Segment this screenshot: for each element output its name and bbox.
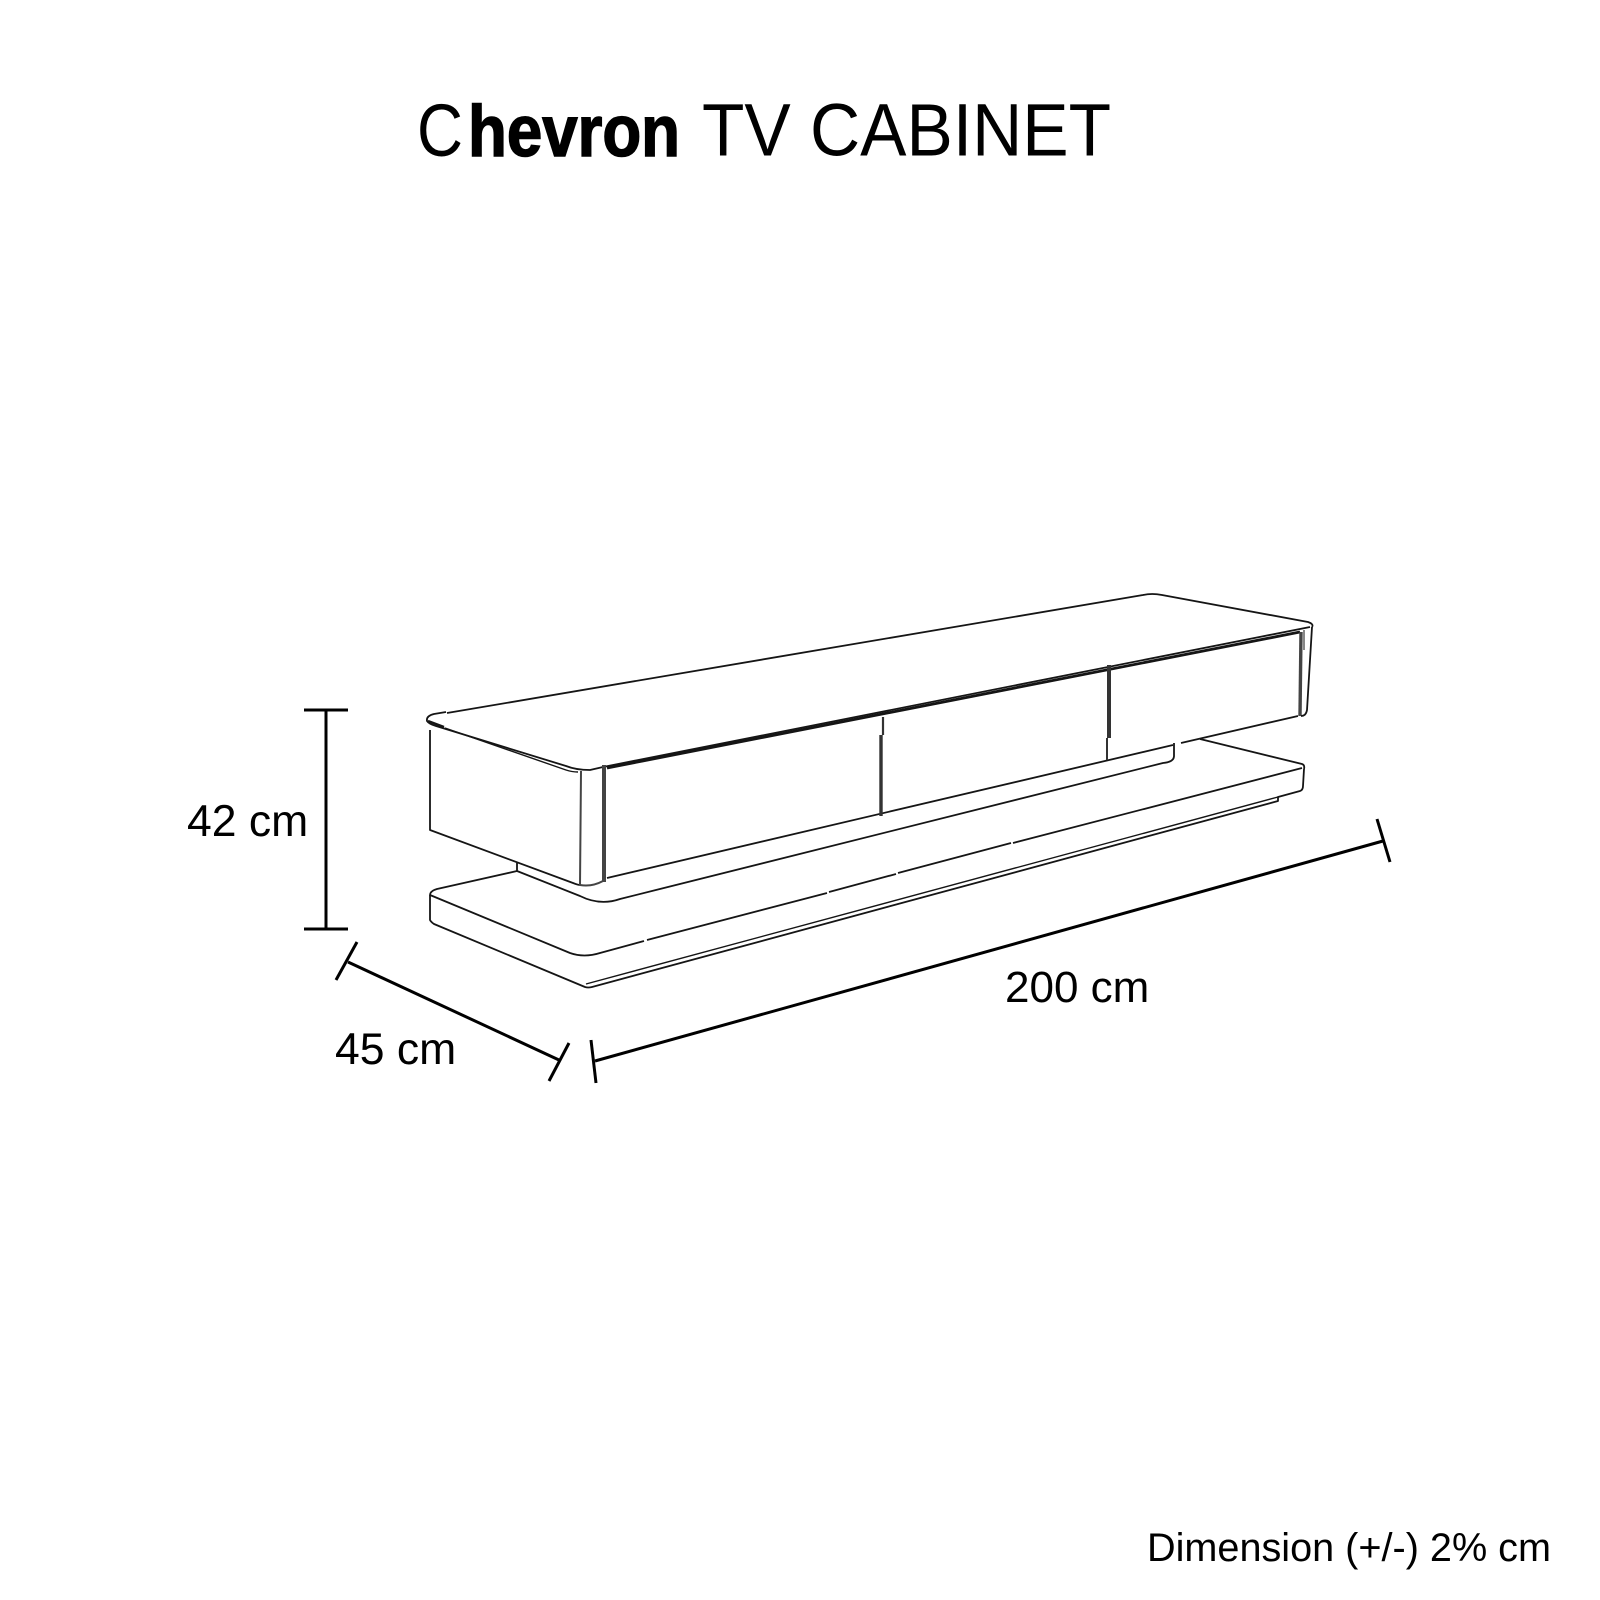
recessed plinth xyxy=(517,743,1174,902)
title xyxy=(417,88,1111,172)
cabinet top surface xyxy=(427,594,1312,772)
base front and side edges xyxy=(430,769,1304,988)
rounded corner post xyxy=(580,765,604,886)
base top surface xyxy=(430,739,1304,956)
height dimension line xyxy=(304,710,348,929)
cabinet right end xyxy=(1300,627,1312,716)
drawer dividers xyxy=(881,665,1109,816)
depth dimension line xyxy=(336,942,569,1081)
title: hevron xyxy=(468,92,680,172)
width label: 200 cm xyxy=(1005,963,1149,1012)
width dimension line xyxy=(591,819,1390,1083)
title: TV CABINET xyxy=(702,88,1111,172)
drawer bottom edge xyxy=(607,716,1298,878)
height label: 42 cm xyxy=(187,797,308,846)
depth label: 45 cm xyxy=(335,1025,456,1074)
tolerance note: Dimension (+/-) 2% cm xyxy=(1147,1526,1551,1570)
title: C xyxy=(417,89,463,172)
cabinet left side panel xyxy=(430,730,580,885)
TV cabinet line drawing xyxy=(427,594,1312,988)
base lower double line xyxy=(586,797,1278,984)
